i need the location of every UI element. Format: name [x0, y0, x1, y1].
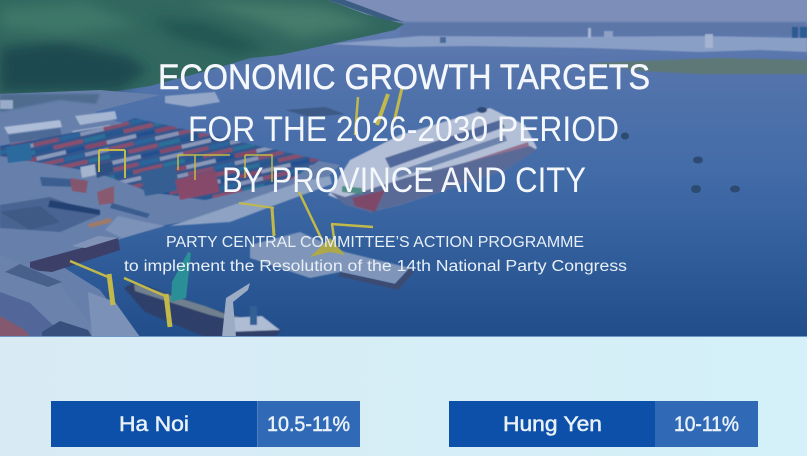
container stacks: [0, 118, 320, 200]
province name: Ha Noi: Ha Noi: [119, 413, 189, 436]
white crane: [222, 283, 250, 337]
subtitle line 1: PARTY CENTRAL COMMITTEE’S ACTION PROGRAMME: [166, 234, 584, 251]
province name: Hung Yen: Hung Yen: [503, 413, 602, 436]
subtitle line 2: to implement the Resolution of the 14th National Party Congress: [124, 258, 627, 275]
cargo ship: [124, 282, 282, 337]
subtitle: [124, 234, 627, 275]
card: Hung Yen: [449, 401, 758, 447]
title: [158, 58, 650, 200]
mountain: [0, 0, 404, 94]
teal crane: [171, 252, 191, 302]
land: port yard: [0, 90, 340, 337]
cruise ship: [328, 107, 537, 212]
left ship: [30, 238, 120, 272]
growth target: Ha Noi: 10.5-11%: [267, 413, 350, 436]
panel: lower background: [0, 337, 807, 456]
hillside foot buildings: [0, 94, 100, 112]
title line 1: ECONOMIC GROWTH TARGETS: [158, 58, 650, 97]
bottom-left land: [30, 268, 38, 271]
marina: [165, 92, 220, 107]
boats: [621, 132, 740, 193]
container details: [0, 143, 220, 238]
ridge shadow: [328, 0, 404, 22]
header photo: port and bay: [0, 0, 807, 337]
card: Ha Noi: [51, 401, 360, 447]
pier: [250, 232, 410, 284]
title line 3: BY PROVINCE AND CITY: [222, 161, 586, 200]
growth target: Hung Yen: 10-11%: [674, 413, 739, 436]
quay: [170, 176, 332, 226]
far shore city: [330, 27, 807, 74]
buildings: [0, 100, 117, 143]
photo bottom edge: [0, 336, 807, 337]
yellow cranes: [70, 88, 402, 327]
title line 2: FOR THE 2026-2030 PERIOD: [188, 110, 619, 149]
